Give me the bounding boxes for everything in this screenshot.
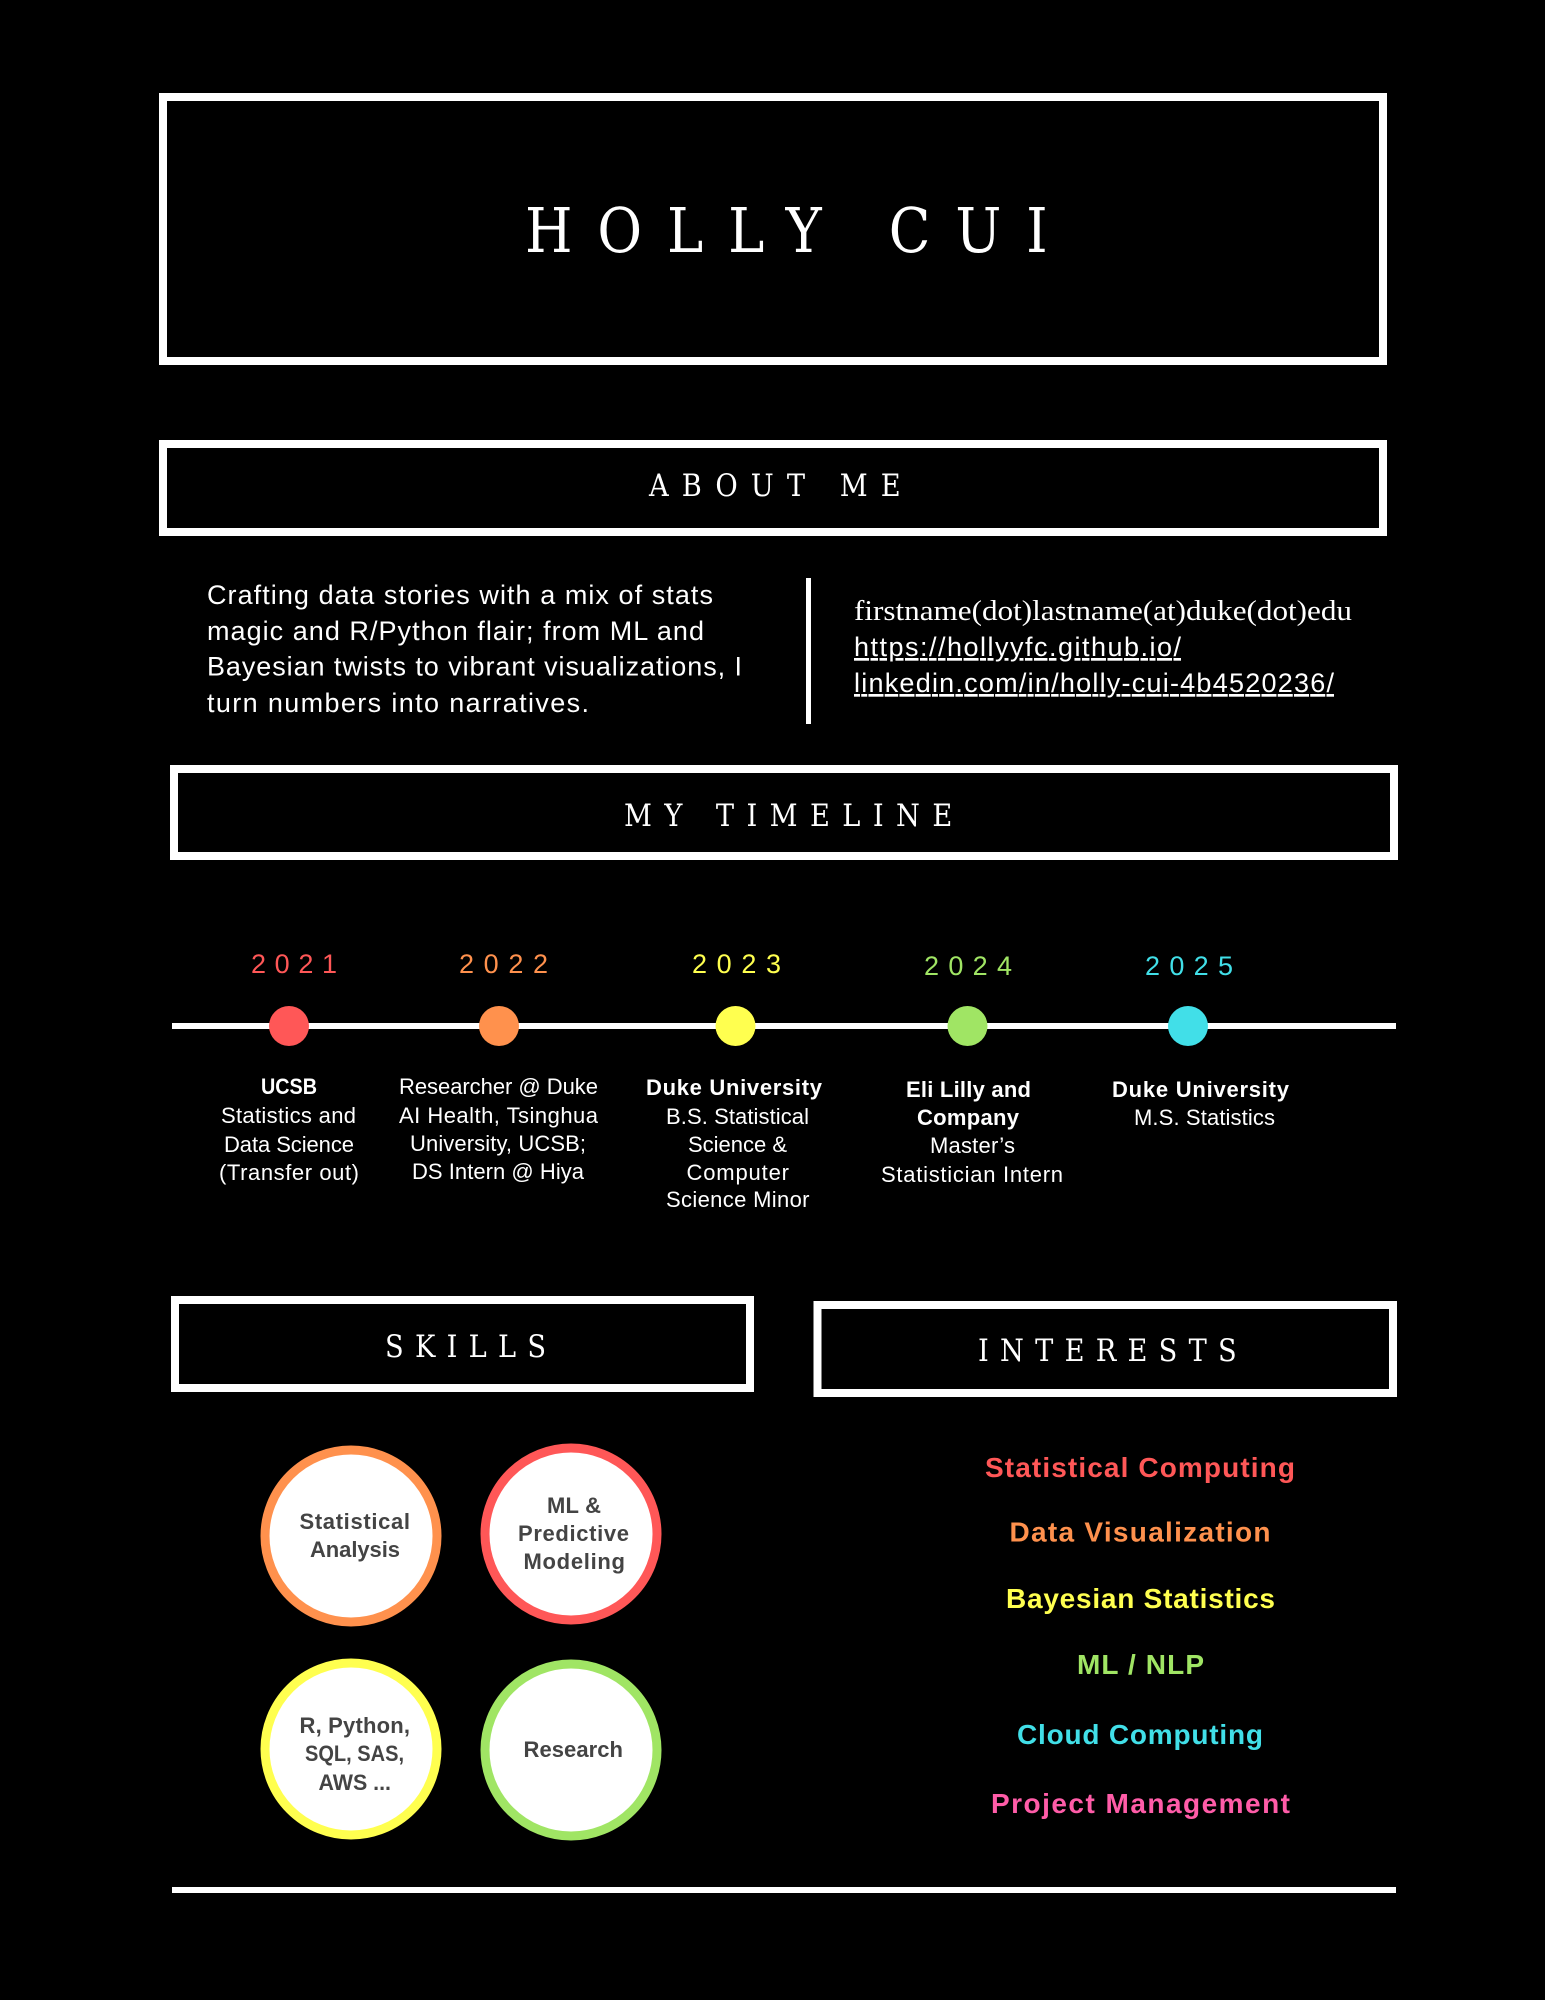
timeline item 2023: Duke University <box>646 1075 823 1100</box>
panel: interests heading <box>818 1305 1393 1393</box>
timeline item 2024: Eli Lilly and <box>906 1077 1031 1102</box>
timeline item 2023: Science & <box>688 1132 787 1157</box>
about me description: magic and R/Python flair; from ML and <box>207 616 704 646</box>
skill: programming languages: AWS ... <box>318 1770 391 1795</box>
skill: statistical analysis: Statistical <box>300 1509 410 1534</box>
timeline item 2023: B.S. Statistical <box>666 1104 809 1129</box>
timeline item 2022: 2022 <box>459 949 548 979</box>
panel: about me heading <box>163 444 1383 532</box>
timeline item 2022: AI Health, Tsinghua <box>399 1103 599 1128</box>
skill: ML and predictive modeling: Predictive <box>518 1521 629 1546</box>
panel: interests list: Project Management <box>991 1788 1290 1819</box>
timeline item 2021: (Transfer out) <box>219 1160 359 1185</box>
panel: skills circles <box>265 1448 657 1836</box>
timeline item 2021: Statistics and <box>221 1103 356 1128</box>
timeline item 2021: 2021 <box>251 949 337 979</box>
timeline item 2021: Data Science <box>224 1132 354 1157</box>
contact links: linkedin.com/in/holly-cui-4b4520236/ <box>854 668 1334 698</box>
timeline chart <box>172 949 1396 1212</box>
timeline item 2024 <box>881 951 1063 1187</box>
timeline item 2025: 2025 <box>1145 951 1233 981</box>
timeline item 2022: Researcher @ Duke <box>399 1074 598 1099</box>
panel: timeline heading <box>174 769 1394 856</box>
panel: about me content <box>207 578 1352 724</box>
skill: ML and predictive modeling: Modeling <box>524 1549 625 1574</box>
skill: programming languages: SQL, SAS, <box>305 1741 404 1766</box>
about me description: turn numbers into narratives. <box>207 688 589 718</box>
timeline item 2022: University, UCSB; <box>410 1131 586 1156</box>
panel: interests list <box>985 1452 1295 1819</box>
timeline item 2023: Science Minor <box>666 1187 810 1212</box>
heading: my timeline: MY TIMELINE <box>624 797 952 833</box>
heading: interests: INTERESTS <box>978 1332 1237 1368</box>
panel: interests list: Cloud Computing <box>1017 1719 1263 1750</box>
timeline item 2022: DS Intern @ Hiya <box>412 1159 585 1184</box>
contact links: firstname(dot)lastname(at)duke(dot)edu <box>854 596 1352 627</box>
timeline item 2024: Company <box>917 1105 1020 1130</box>
timeline item 2023 <box>646 949 823 1212</box>
panel: interests list: Bayesian Statistics <box>1006 1583 1275 1614</box>
skill: programming languages: R, Python, <box>300 1713 410 1738</box>
heading: skills: SKILLS <box>385 1328 546 1364</box>
about me description: Bayesian twists to vibrant visualizations, I <box>207 652 742 682</box>
panel: interests list: Data Visualization <box>1010 1516 1270 1548</box>
skill: research <box>485 1664 657 1836</box>
panel: interests list: Statistical Computing <box>985 1452 1295 1483</box>
skill: statistical analysis: Analysis <box>310 1537 400 1562</box>
skill: ML and predictive modeling <box>485 1448 657 1620</box>
timeline item 2025: Duke University <box>1112 1077 1290 1102</box>
timeline item 2025: M.S. Statistics <box>1134 1105 1275 1130</box>
timeline item 2024: Master’s <box>930 1133 1015 1158</box>
timeline item 2025 <box>1112 951 1290 1130</box>
panel: skills heading <box>175 1300 750 1388</box>
title: HOLLY CUI <box>525 195 1048 267</box>
skill: research: Research <box>524 1737 623 1762</box>
about me description: Crafting data stories with a mix of stats <box>207 580 713 610</box>
timeline item 2023: Computer <box>686 1160 789 1185</box>
panel: interests list: ML / NLP <box>1077 1649 1204 1680</box>
skill: ML and predictive modeling: ML & <box>547 1493 601 1518</box>
about me description <box>207 580 742 718</box>
title panel <box>163 97 1383 361</box>
contact links: https://hollyyfc.github.io/ <box>854 632 1181 662</box>
heading: about me: ABOUT ME <box>648 467 901 503</box>
timeline item 2022 <box>399 949 599 1184</box>
skill: programming languages <box>265 1663 437 1835</box>
contact links <box>854 596 1352 698</box>
timeline item 2023: 2023 <box>692 949 781 979</box>
timeline item 2024: 2024 <box>924 951 1012 981</box>
timeline item 2024: Statistician Intern <box>881 1162 1063 1187</box>
timeline item 2021: UCSB <box>261 1074 317 1099</box>
skill: statistical analysis <box>265 1450 437 1622</box>
timeline item 2021 <box>219 949 359 1185</box>
